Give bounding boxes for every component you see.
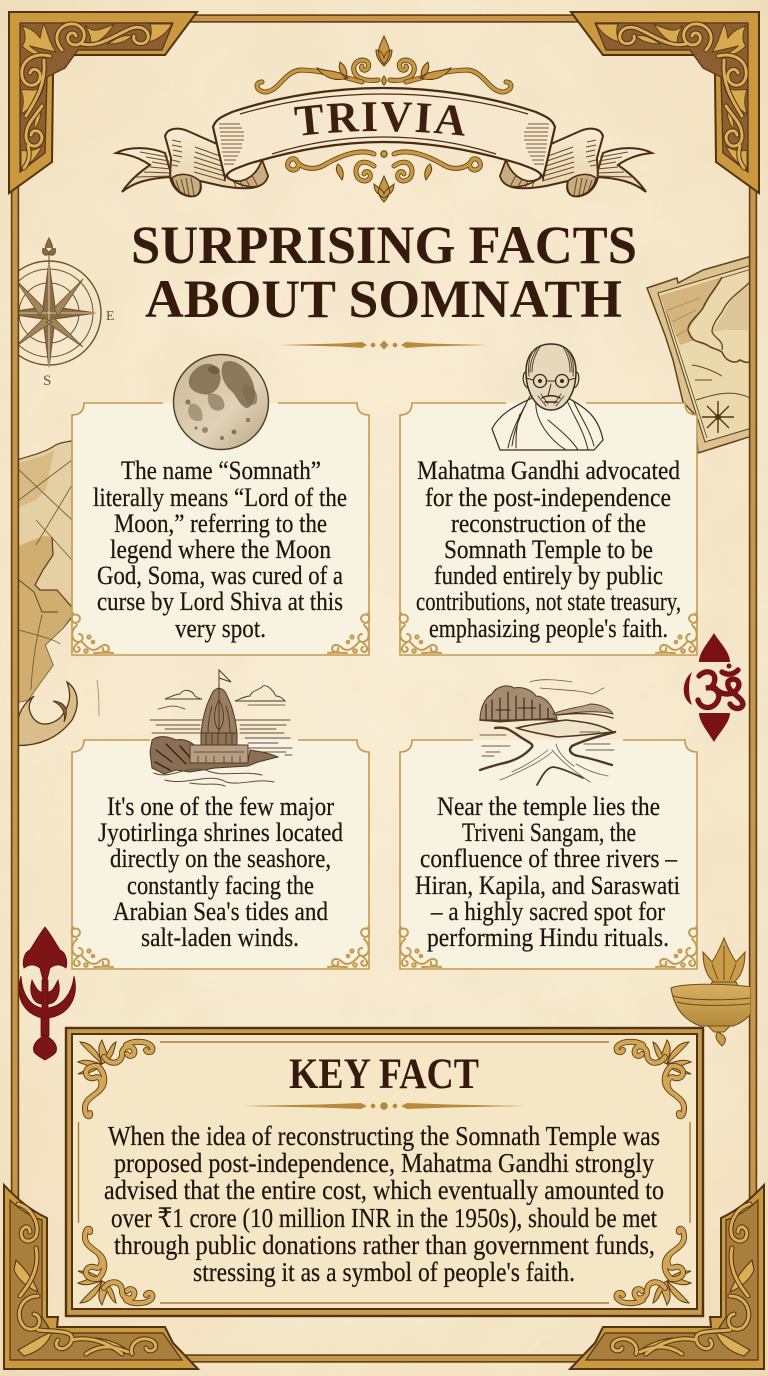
fact text: performing Hindu rituals. <box>427 923 669 952</box>
icon: moon <box>174 354 268 450</box>
key fact body: proposed post-independence, Mahatma Gandhi strongly <box>114 1148 654 1178</box>
fact text <box>416 456 681 643</box>
fact text: God, Soma, was cured of a <box>97 561 343 590</box>
corner ornament: bottom left <box>4 1185 198 1369</box>
title divider <box>279 340 488 350</box>
fact text: directly on the seashore, <box>110 844 331 873</box>
key fact body: advised that the entire cost, which eventually amounted to <box>104 1175 664 1205</box>
title: SURPRISING FACTS <box>131 215 637 275</box>
key fact corner ornaments <box>78 1040 691 1305</box>
icon: oil lamp <box>671 938 760 1046</box>
compass letter E: E <box>106 309 115 324</box>
right ribbon tail <box>500 129 652 196</box>
icon: om symbol <box>684 633 743 742</box>
key fact body <box>104 1121 664 1287</box>
key fact body: When the idea of reconstructing the Somnath Temple was <box>108 1121 660 1151</box>
icon: Gandhi portrait <box>492 344 603 450</box>
panel: Triveni Sangam fact <box>400 740 697 969</box>
ribbon inner lines <box>240 94 528 154</box>
compass letter S: S <box>43 373 51 389</box>
ribbon end hatching <box>219 124 549 164</box>
key fact body: stressing it as a symbol of people's faith. <box>193 1257 575 1287</box>
key fact body: over ₹1 crore (10 million INR in the 1950s), should be met <box>111 1203 657 1233</box>
key fact heading: KEY FACT <box>289 1051 479 1098</box>
fact text: very spot. <box>175 614 266 643</box>
fact text: Mahatma Gandhi advocated <box>417 456 680 485</box>
fact text: Somnath Temple to be <box>444 535 653 564</box>
icon: temple on the sea <box>150 670 292 786</box>
fact text: Arabian Sea's tides and <box>113 897 328 926</box>
fact text <box>93 456 347 643</box>
fact text: Hiran, Kapila, and Saraswati <box>415 871 680 900</box>
fact text: reconstruction of the <box>451 509 646 538</box>
fact text <box>98 792 343 952</box>
fact text: emphasizing people's faith. <box>429 614 668 643</box>
left ribbon tail <box>116 129 268 196</box>
title: ABOUT SOMNATH <box>145 269 622 329</box>
fact text: Jyotirlinga shrines located <box>98 818 343 847</box>
key fact divider <box>243 1102 525 1110</box>
title <box>131 215 637 329</box>
fact text: funded entirely by public <box>434 561 663 590</box>
illustration: compass rose <box>19 237 102 368</box>
fact text <box>415 792 680 952</box>
fact text: curse by Lord Shiva at this <box>97 587 343 616</box>
fact text: confluence of three rivers – <box>420 844 678 873</box>
fact text: Near the temple lies the <box>437 792 660 821</box>
banner ribbon <box>116 88 652 196</box>
decorative map fold line <box>97 680 99 716</box>
banner label: TRIVIA <box>294 102 465 136</box>
fact text: salt-laden winds. <box>141 923 299 952</box>
illustration: old map left with curl <box>19 440 78 746</box>
fact text: – a highly sacred spot for <box>430 897 665 926</box>
fact text: contributions, not state treasury, <box>416 587 681 616</box>
key fact body: through public donations rather than government funds, <box>114 1230 655 1260</box>
corner ornament: top left <box>9 12 197 193</box>
corner ornament: top right <box>571 12 759 193</box>
fact text: constantly facing the <box>127 871 314 900</box>
fact text: It's one of the few major <box>107 792 334 821</box>
panel: seashore fact <box>72 740 369 969</box>
fact text: for the post-independence <box>425 483 671 512</box>
fact text: Moon,” referring to the <box>114 509 327 538</box>
bottom flourish <box>288 151 480 202</box>
fact text: literally means “Lord of the <box>93 483 347 512</box>
top flourish <box>257 36 511 92</box>
panel: key fact <box>66 1028 703 1316</box>
icon: river confluence <box>480 680 615 785</box>
ribbon main <box>213 88 555 178</box>
fact text: Triveni Sangam, the <box>462 818 636 847</box>
panel: Gandhi fact <box>400 403 697 655</box>
fact text: legend where the Moon <box>110 535 331 564</box>
corner ornament: bottom right <box>570 1185 764 1369</box>
fact text: The name “Somnath” <box>121 456 321 485</box>
panel: moon fact <box>72 403 369 655</box>
illustration: old map right <box>647 256 752 453</box>
icon: trident <box>19 927 75 1060</box>
